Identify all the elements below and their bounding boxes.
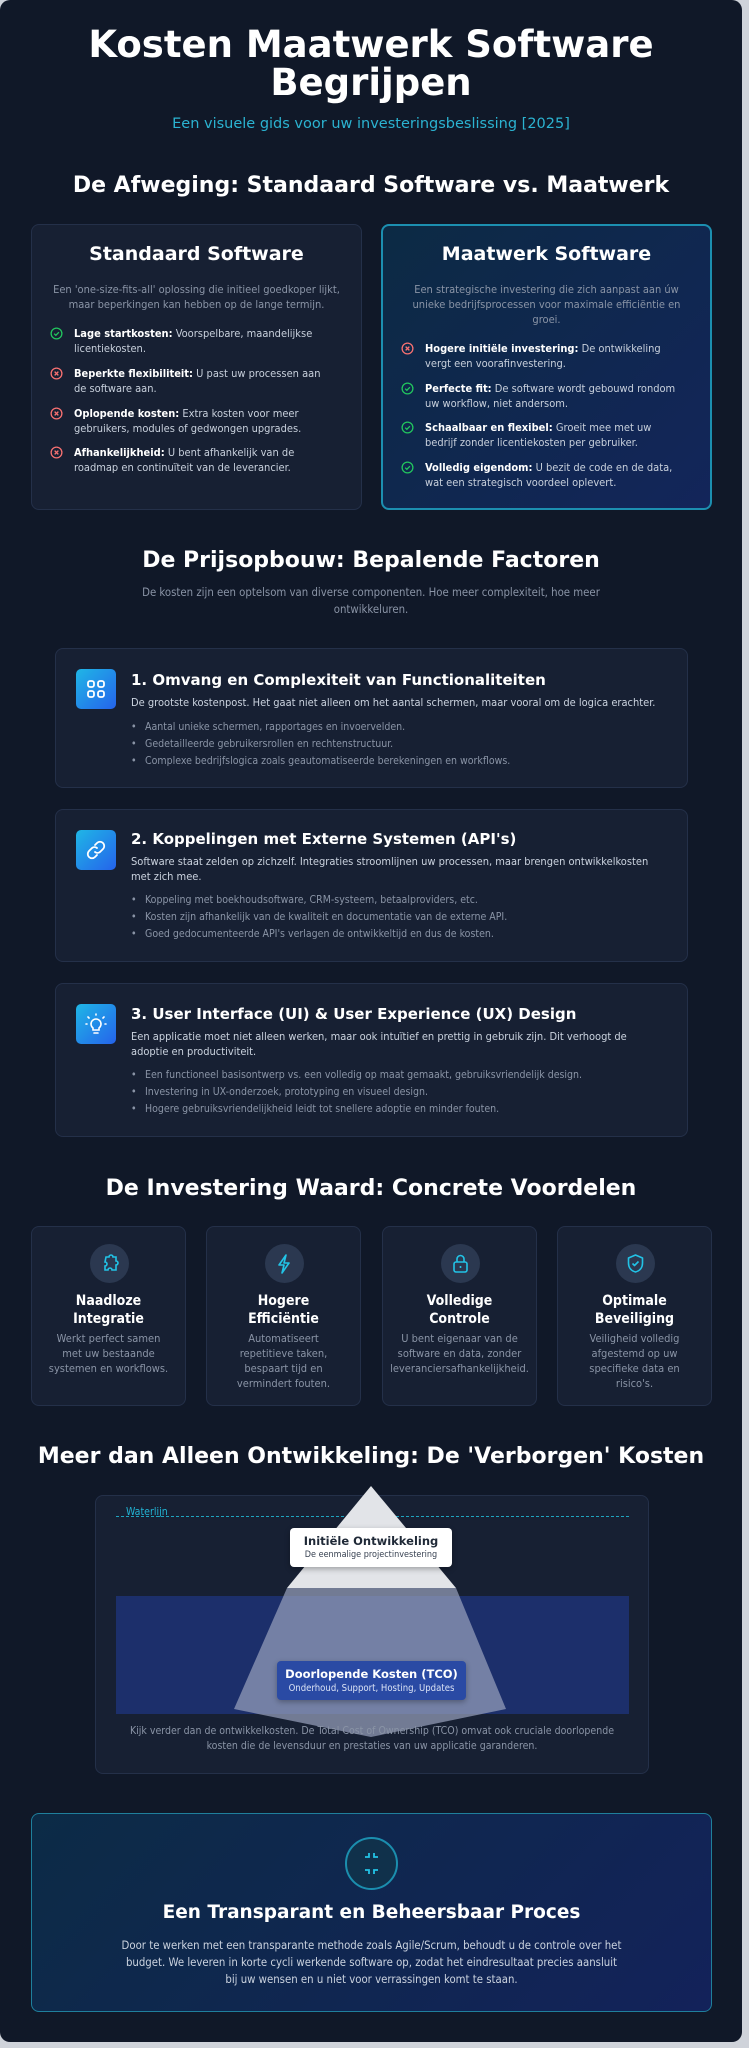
factor title: 1. Omvang en Complexiteit van Functionaliteiten [131, 671, 546, 689]
benefit: controle [382, 1226, 537, 1406]
heading: afweging: De Afweging: Standaard Software vs. Maatwerk [73, 173, 669, 198]
benefit title: Optimale [602, 1293, 667, 1309]
panel: iceberg [95, 1495, 649, 1774]
panel: maatwerk software [381, 224, 712, 510]
iceberg caption: Kijk verder dan de ontwikkelkosten. De Total Cost of Ownership (TCO) omvat ook cruciale doorlopende kosten die de levensduur en prestaties van uw applicatie garanderen. [130, 1725, 614, 1752]
icon: lock [441, 1244, 480, 1283]
panel: standaard software [31, 224, 362, 510]
item: volledig eigendom: Volledig eigendom: U bezit de code en de data, wat een strategisch voordeel oplevert. [425, 461, 672, 489]
factor description: De grootste kostenpost. Het gaat niet alleen om het aantal schermen, maar vooral om de logica erachter. [131, 696, 655, 709]
heading: voordelen: De Investering Waard: Concrete Voordelen [106, 1176, 636, 1201]
title [88, 23, 654, 104]
bullets: Koppeling met boekhoudsoftware, CRM-systeem, betaalproviders, etc. [145, 894, 478, 906]
icon: lightbulb [76, 1004, 116, 1044]
bullets: Investering in UX-onderzoek, prototyping en visueel design. [145, 1086, 428, 1098]
waterline [116, 1516, 629, 1517]
item: schaalbaar: Schaalbaar en flexibel: Groeit mee met uw bedrijf zonder licentiekosten per gebruiker. [425, 421, 651, 449]
bullets [132, 894, 507, 940]
item: perfecte fit: Perfecte fit: De software wordt gebouwd rondom uw workflow, niet andersom. [425, 382, 675, 410]
icon: shield [616, 1244, 655, 1283]
benefit title: Integratie [73, 1311, 144, 1327]
bullets: Gedetailleerde gebruikersrollen en rechtenstructuur. [145, 738, 393, 750]
heading: verborgen kosten: Meer dan Alleen Ontwikkeling: De 'Verborgen' Kosten [38, 1444, 704, 1469]
benefit text: Veiligheid volledig afgestemd op uw specifieke data en risico's. [589, 1332, 680, 1390]
title: Begrijpen [270, 61, 472, 104]
item: beperkte flexibiliteit: Beperkte flexibiliteit: U past uw processen aan de software aan. [74, 367, 320, 395]
label: doorlopende kosten: Onderhoud, Support, Hosting, Updates [289, 1683, 454, 1694]
process text: budget. We leveren in korte cycli werkende software op, zodat het eindresultaat precies aansluit [126, 1956, 617, 1969]
benefit text: Automatiseert repetitieve taken, bespaart tijd en vermindert fouten. [237, 1332, 330, 1390]
icon: bolt [265, 1244, 304, 1283]
panel: factor 3 [55, 983, 688, 1137]
factor title: 3. User Interface (UI) & User Experience (UX) Design [131, 1005, 576, 1023]
factor description: Een applicatie moet niet alleen werken, maar ook intuïtief en prettig in gebruik zijn. Dit verhoogt de adoptie en productiviteit. [131, 1030, 627, 1058]
waterline label: Waterlijn [126, 1506, 168, 1518]
card description: Een strategische investering die zich aanpast aan úw unieke bedrijfsprocessen voor maximale efficiëntie en groei. [413, 283, 680, 326]
bullets: Kosten zijn afhankelijk van de kwaliteit en documentatie van de externe API. [145, 911, 507, 923]
intro text: De kosten zijn een optelsom van diverse componenten. Hoe meer complexiteit, hoe meer ontwikkeluren. [142, 586, 600, 616]
card title: Maatwerk Software [442, 243, 651, 265]
item: lage startkosten: Lage startkosten: Voorspelbare, maandelijkse licentiekosten. [74, 327, 312, 355]
label: initiele ontwikkeling: De eenmalige projectinvestering [305, 1550, 437, 1560]
benefit title [248, 1293, 319, 1327]
benefit: beveiliging [557, 1226, 712, 1406]
panel: proces [31, 1813, 712, 2012]
subtitle: Een visuele gids voor uw investeringsbeslissing [2025] [172, 116, 570, 132]
benefit title [73, 1293, 144, 1327]
label: initiele ontwikkeling [290, 1528, 452, 1567]
panel: factor 1 [55, 648, 688, 788]
process title: Een Transparant en Beheersbaar Proces [163, 1902, 580, 1923]
item: hogere investering: Hogere initiële investering: De ontwikkeling vergt een voorafinvestering. [425, 342, 661, 370]
benefit title: Hogere [258, 1293, 309, 1309]
benefit text: U bent eigenaar van de software en data, zonder leveranciersafhankelijkheid. [390, 1332, 529, 1375]
benefit: integratie [31, 1226, 186, 1406]
benefit title: Efficiëntie [248, 1311, 319, 1327]
benefit: efficientie [206, 1226, 361, 1406]
factor description: Software staat zelden op zichzelf. Integraties stroomlijnen uw processen, maar brengen ontwikkelkosten met zich mee. [131, 855, 648, 883]
panel: factor 2 [55, 809, 688, 962]
benefit title [595, 1293, 674, 1327]
label: doorlopende kosten [277, 1661, 466, 1700]
bullets: Goed gedocumenteerde API's verlagen de ontwikkeltijd en dus de kosten. [145, 928, 494, 940]
heading: prijsopbouw: De Prijsopbouw: Bepalende Factoren [142, 548, 600, 573]
benefit title: Controle [429, 1311, 490, 1327]
underwater band [116, 1596, 629, 1714]
bullets: Een functioneel basisontwerp vs. een volledig op maat gemaakt, gebruiksvriendelijk design. [145, 1069, 582, 1081]
benefit text: Werkt perfect samen met uw bestaande systemen en workflows. [49, 1332, 168, 1375]
bullets: Hogere gebruiksvriendelijkheid leidt tot snellere adoptie en minder fouten. [145, 1103, 499, 1115]
icon: focus [345, 1837, 398, 1890]
label: initiele ontwikkeling: Initiële Ontwikkeling [304, 1534, 438, 1548]
bullets: Aantal unieke schermen, rapportages en invoervelden. [145, 721, 405, 733]
title: Kosten Maatwerk Software [88, 23, 654, 66]
item: oplopende kosten: Oplopende kosten: Extra kosten voor meer gebruikers, modules of gedwongen upgrades. [74, 407, 301, 435]
process text [122, 1939, 622, 1986]
icon: link [76, 830, 116, 870]
icon: grid [76, 669, 116, 709]
icon: puzzle [90, 1244, 129, 1283]
benefit title: Naadloze [76, 1293, 141, 1309]
benefit title: Volledige [427, 1293, 492, 1309]
bullets [132, 1069, 582, 1115]
item: afhankelijkheid: Afhankelijkheid: U bent afhankelijk van de roadmap en continuïteit van de leverancier. [74, 446, 294, 474]
card title: Standaard Software [89, 243, 304, 265]
benefit title: Beveiliging [595, 1311, 674, 1327]
bullets [132, 721, 510, 767]
bullets: Complexe bedrijfslogica zoals geautomatiseerde berekeningen en workflows. [145, 755, 510, 767]
process text: Door te werken met een transparante methode zoals Agile/Scrum, behoudt u de controle over het [122, 1939, 621, 1952]
label: doorlopende kosten: Doorlopende Kosten (TCO) [285, 1667, 458, 1681]
card description: Een 'one-size-fits-all' oplossing die initieel goedkoper lijkt, maar beperkingen kan hebben op de lange termijn. [53, 283, 340, 311]
process text: bij uw wensen en u niet voor verrassingen komt te staan. [225, 1973, 518, 1986]
factor title: 2. Koppelingen met Externe Systemen (API's) [131, 830, 516, 848]
benefit title [426, 1293, 492, 1327]
